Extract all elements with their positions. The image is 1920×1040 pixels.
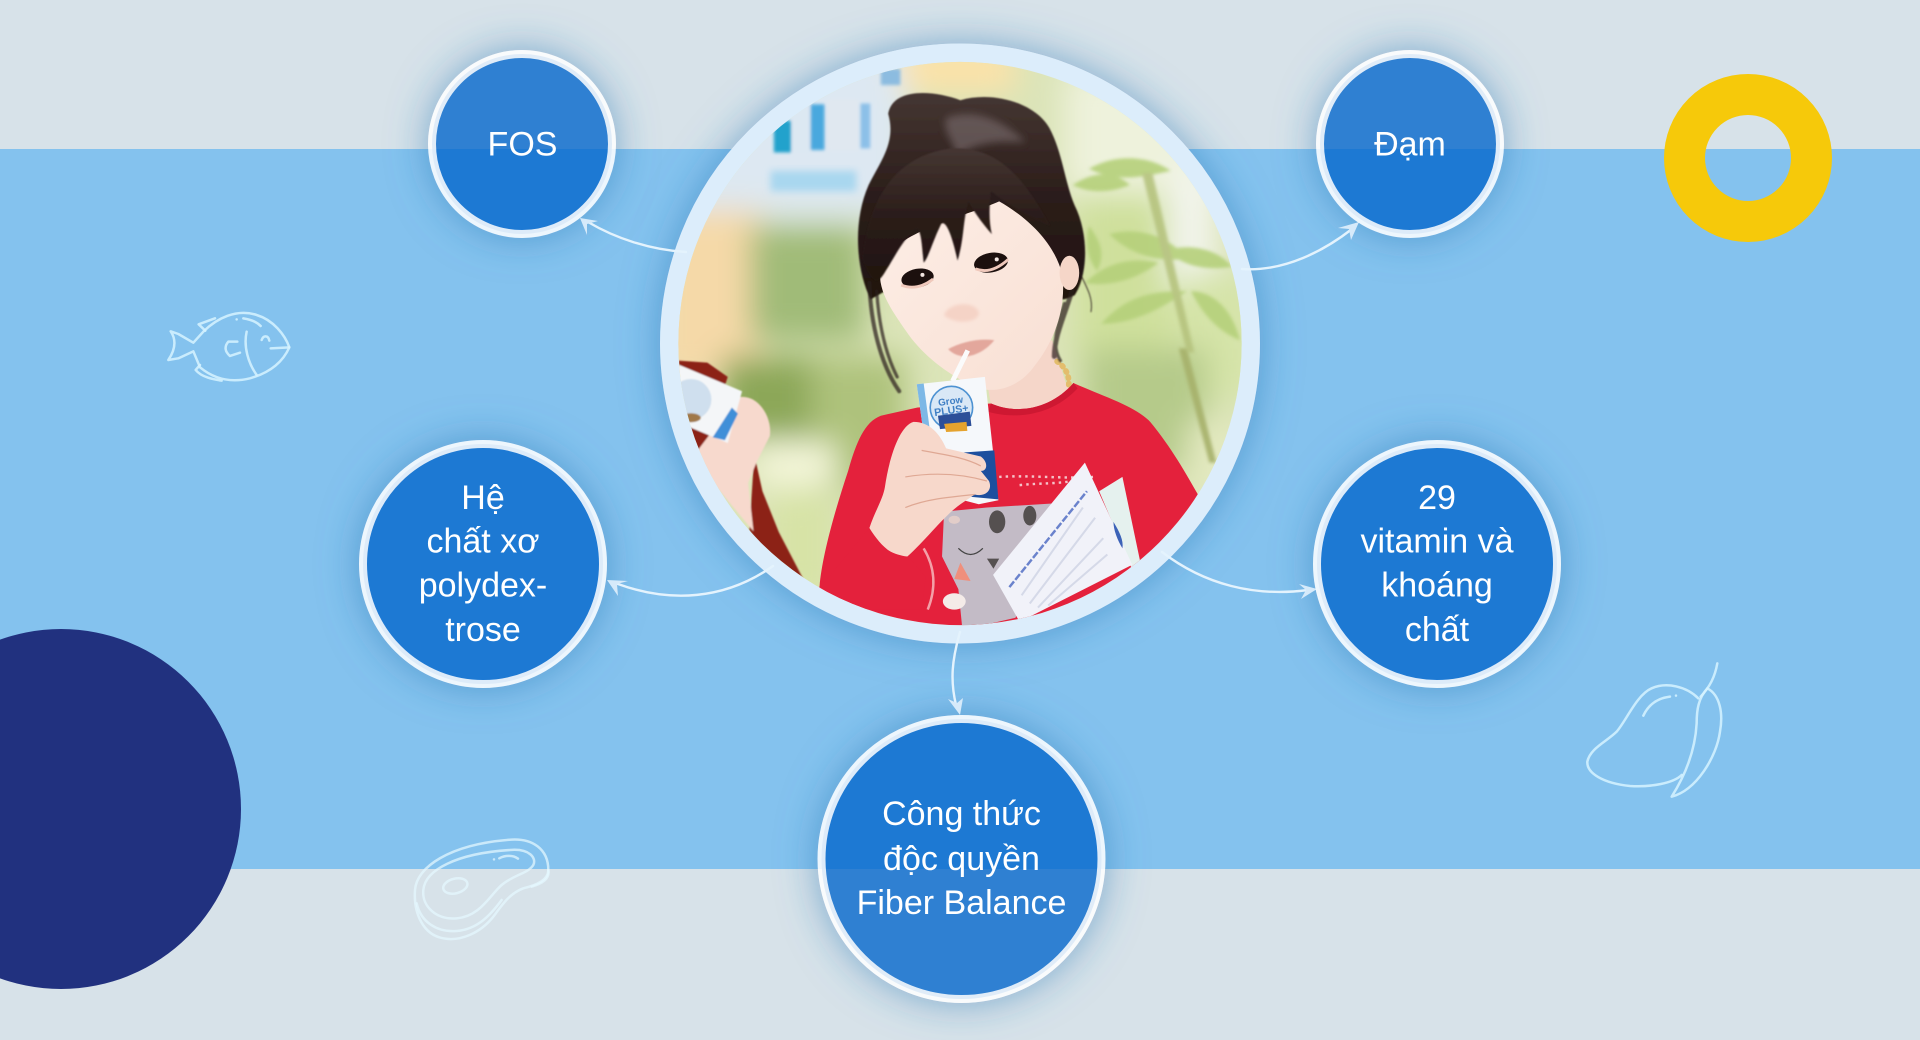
- sleeve cuff: [820, 528, 891, 610]
- node: Hệ chất xơ polydextrose: trose: [445, 611, 521, 649]
- node: Hệ chất xơ polydextrose: [363, 444, 603, 684]
- arrow: photo to vitamins: [1162, 552, 1317, 599]
- node: FOS: [432, 54, 612, 234]
- face: [880, 201, 1063, 390]
- node: 29 vitamin và khoáng chất: [1317, 444, 1557, 684]
- node: 29 vitamin và khoáng chất: vitamin và: [1360, 522, 1514, 560]
- node: FOS: FOS: [488, 126, 557, 164]
- carton: Grow: [938, 395, 964, 409]
- blurred garden background: [678, 62, 1242, 588]
- ear: [1060, 256, 1079, 290]
- hair behind: [858, 93, 1092, 391]
- left child's arm and carton: [671, 361, 803, 579]
- nose and mouth: [944, 304, 979, 322]
- node: Công thức độc quyền Fiber Balance: độc quyền: [883, 840, 1040, 878]
- shirt details: [924, 516, 960, 610]
- node: Hệ chất xơ polydextrose: polydex-: [419, 566, 547, 604]
- central photo circle: [656, 46, 1260, 650]
- decorative navy circle: [0, 629, 241, 989]
- arrow: photo to FOS: [580, 218, 686, 252]
- node: Đạm: [1320, 54, 1500, 234]
- node: Công thức độc quyền Fiber Balance: [822, 719, 1102, 999]
- node: Công thức độc quyền Fiber Balance: Fiber Balance: [857, 884, 1066, 922]
- hand holding carton: [869, 422, 990, 557]
- papers: [993, 463, 1140, 622]
- shadows behind circles: [359, 44, 1561, 1003]
- node: Công thức độc quyền Fiber Balance: Công thức: [882, 795, 1041, 833]
- node: Đạm: Đạm: [1374, 126, 1446, 164]
- arrow: photo to fibre system: [607, 566, 773, 596]
- foliage: [1073, 158, 1240, 463]
- bangs: [866, 148, 1034, 280]
- photo: girl drinking from a carton: [678, 62, 1242, 626]
- carton: [917, 377, 998, 504]
- arrow: photo to Đạm: [1242, 222, 1359, 269]
- eyes and brows: [900, 252, 1009, 289]
- icon: mango: [1587, 663, 1721, 797]
- straw: [953, 350, 968, 381]
- red shirt: [819, 383, 1198, 626]
- shirt print: cat: [942, 503, 1052, 630]
- node: 29 vitamin và khoáng chất: 29: [1418, 479, 1456, 517]
- background band: [0, 149, 1920, 869]
- icon: fish: [168, 313, 289, 381]
- node: 29 vitamin và khoáng chất: chất: [1405, 611, 1470, 649]
- carton: PLUS+: [933, 402, 969, 419]
- decorative yellow ring: [1684, 94, 1812, 222]
- icon: meat: [415, 839, 549, 939]
- node: Hệ chất xơ polydextrose: chất xơ: [426, 522, 540, 560]
- node: Hệ chất xơ polydextrose: Hệ: [461, 479, 505, 517]
- node: 29 vitamin và khoáng chất: khoáng: [1381, 566, 1493, 604]
- necklace and neck: [988, 340, 1069, 409]
- arrow: photo to Fiber Balance: [948, 632, 963, 715]
